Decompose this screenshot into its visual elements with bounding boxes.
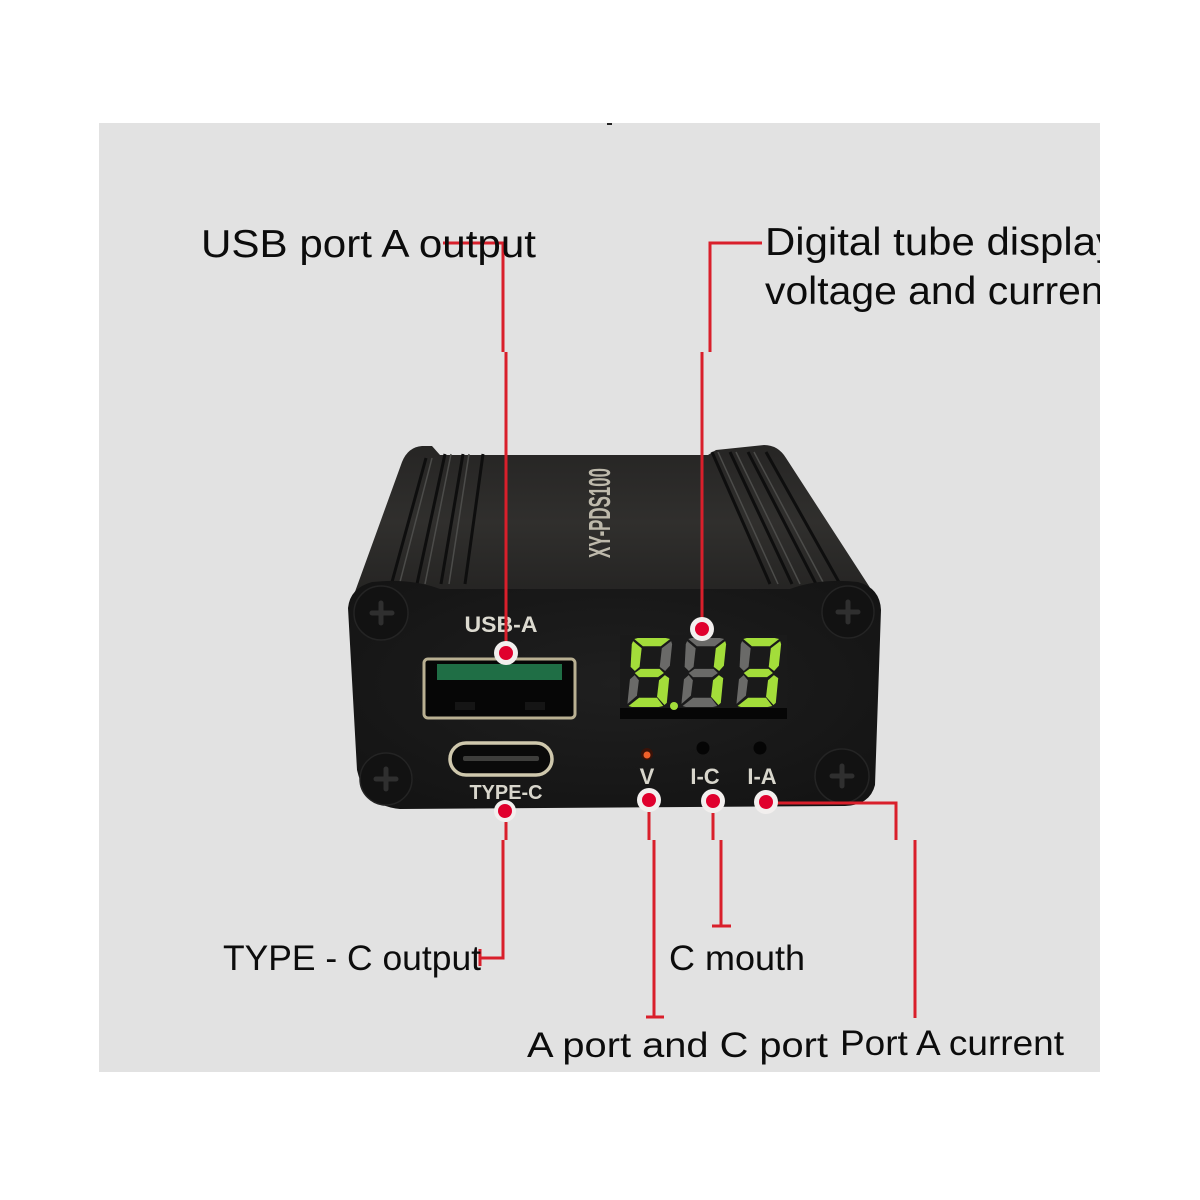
line: usb port a <box>443 243 506 645</box>
marker: usb-a <box>494 641 518 665</box>
marker: i-c <box>701 789 725 813</box>
infographic <box>99 123 1100 1072</box>
line: type-c <box>480 822 506 966</box>
digit 1 <box>681 638 726 707</box>
marker: v <box>637 788 661 812</box>
led labels: I-A <box>747 764 777 789</box>
screws <box>354 586 874 805</box>
marker dots <box>494 617 778 822</box>
digital display <box>620 635 787 719</box>
device model text: XY-PDS100 <box>582 468 617 558</box>
label: type-c output: TYPE - C output <box>223 939 481 978</box>
label: port a current: Port A current <box>840 1024 1064 1063</box>
line: a and c port <box>646 812 664 1017</box>
decimal point <box>670 702 678 710</box>
small top mark <box>607 123 612 125</box>
marker: display <box>690 617 714 641</box>
callout lines <box>443 243 915 1018</box>
panel: grey backdrop <box>99 123 1100 1072</box>
device front face <box>348 581 881 809</box>
label: usb port a output: USB port A output <box>201 223 536 266</box>
indicator leds <box>641 742 766 760</box>
line: port a current <box>775 803 915 1018</box>
digit 5 <box>627 638 672 707</box>
callout labels <box>201 221 1118 1065</box>
marker: type-c <box>494 800 516 822</box>
usb-a port <box>424 659 575 718</box>
led labels: I-C <box>690 764 720 789</box>
type-c label: TYPE-C <box>470 782 542 804</box>
device top housing <box>352 445 878 600</box>
line: c mouth <box>712 813 731 926</box>
led labels: V <box>640 764 655 789</box>
line: digital display <box>702 243 762 622</box>
type-c port <box>450 743 552 775</box>
led labels <box>640 764 777 789</box>
device: power module <box>348 445 881 809</box>
usb-a label: USB-A <box>464 612 538 637</box>
label: digital tube display: Digital tube display <box>765 221 1118 264</box>
label: a port and c port: A port and C port <box>527 1026 828 1065</box>
digit 3 <box>736 638 781 707</box>
marker: i-a <box>754 790 778 814</box>
label: c mouth: C mouth <box>669 939 805 978</box>
label: voltage and current: voltage and current <box>765 270 1115 313</box>
